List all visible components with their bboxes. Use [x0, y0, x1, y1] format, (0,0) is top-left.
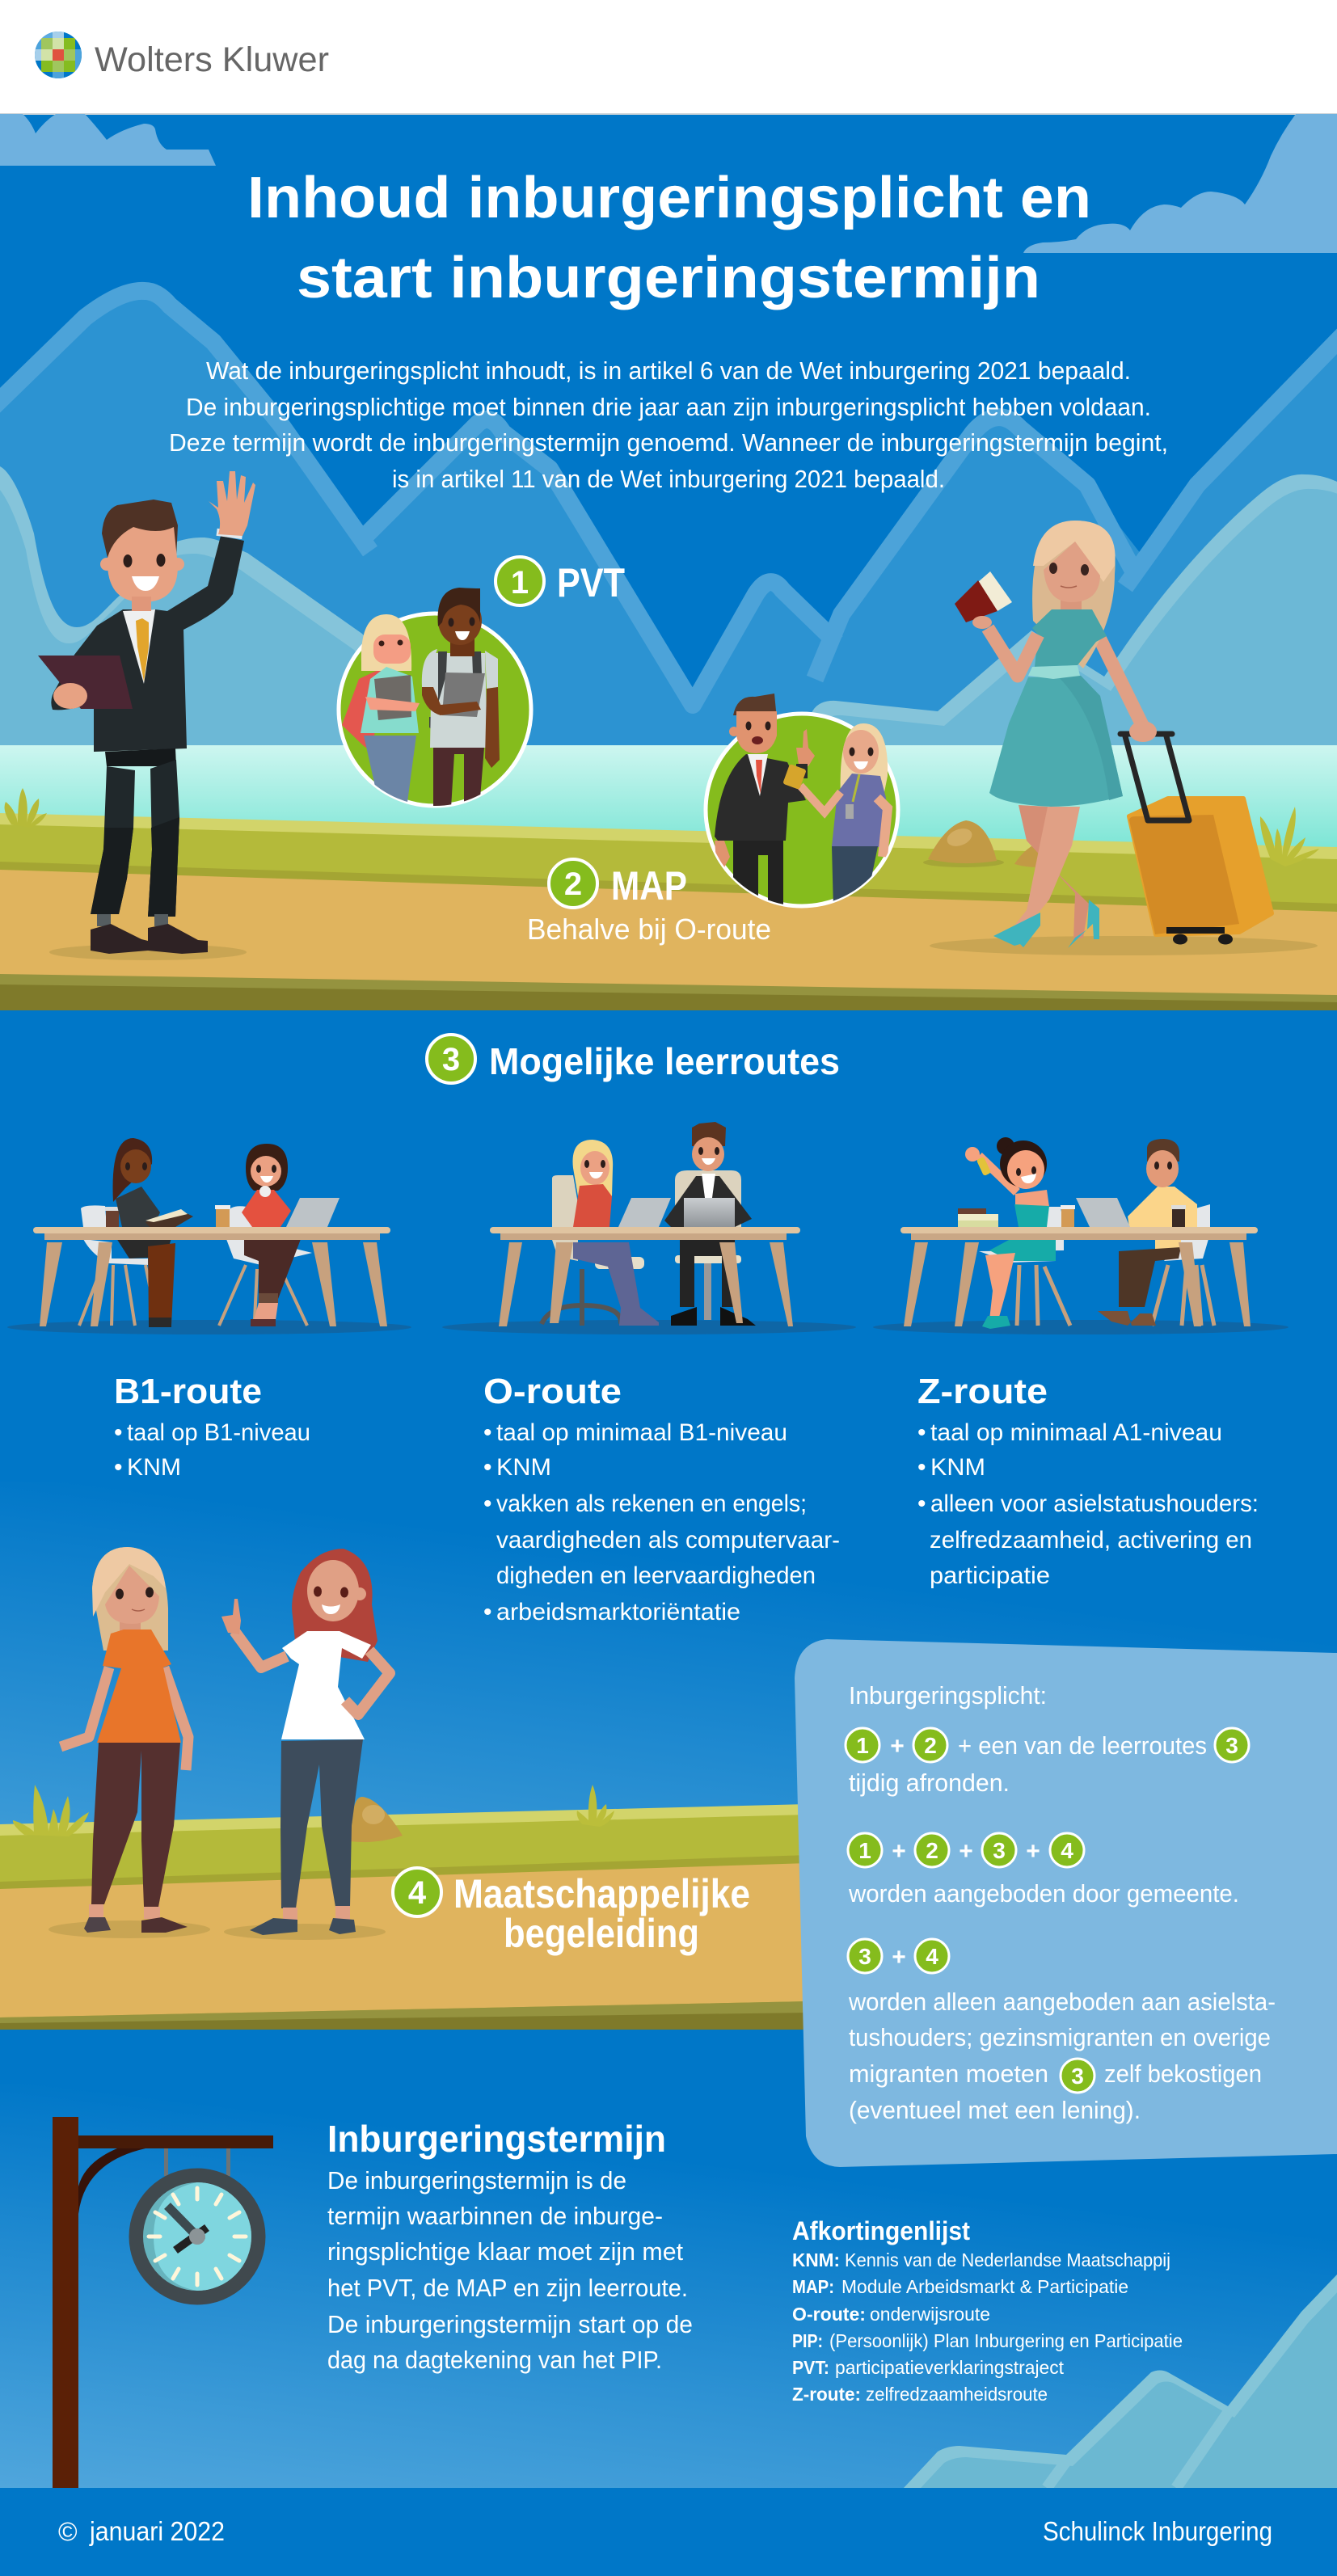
icon: hanging clock — [53, 2117, 273, 2488]
route text: Z-route: • — [917, 1419, 926, 1446]
rule 1: 2 — [924, 1733, 937, 1758]
step 2: MAP label — [527, 859, 771, 946]
route text: Z-route — [917, 1372, 1259, 1589]
section: inburgeringstermijn: De inburgeringstermijn start op de — [327, 2310, 693, 2338]
section: inburgeringstermijn: dag na dagtekening van het PIP. — [327, 2346, 662, 2374]
route text: Z-route: zelfredzaamheid, activering en — [930, 1527, 1252, 1554]
lower ground band — [0, 1804, 808, 2030]
rule 2 — [848, 1833, 1239, 1908]
step 4 label — [393, 1868, 750, 1956]
abbreviations list: Kennis van de Nederlandse Maatschappij — [845, 2249, 1170, 2270]
section: inburgeringstermijn: ringsplichtige klaar moet zijn met — [327, 2237, 683, 2266]
rule 3: 3 — [1071, 2064, 1084, 2089]
rule 3: 4 — [926, 1944, 938, 1969]
lower section background — [0, 2084, 1337, 2488]
step 4 label: begeleiding — [504, 1911, 699, 1956]
intro paragraph: is in artikel 11 van de Wet inburgering 2021 bepaald. — [392, 465, 945, 493]
route text: B1-route: • — [114, 1454, 123, 1481]
abbreviations list — [792, 2216, 1183, 2405]
abbreviations list: Afkortingenlijst — [792, 2216, 970, 2245]
step 2: MAP label: MAP — [611, 863, 687, 909]
intro paragraph — [169, 356, 1168, 493]
route text: B1-route: taal op B1-niveau — [127, 1419, 310, 1446]
section 3 heading: Mogelijke leerroutes — [489, 1040, 840, 1082]
abbreviations list: onderwijsroute — [870, 2304, 990, 2325]
rule 3: zelf bekostigen — [1104, 2060, 1262, 2088]
plant lower middle — [577, 1785, 614, 1827]
hero landscape background — [0, 291, 1337, 1010]
footer: © — [58, 2517, 78, 2546]
section: inburgeringstermijn: De inburgeringstermijn is de — [327, 2166, 626, 2194]
section 3 heading: 3 — [442, 1042, 460, 1077]
section: inburgeringstermijn: Inburgeringstermijn — [327, 2118, 666, 2160]
top left cloud — [0, 114, 216, 166]
route text: Z-route: Z-route — [917, 1372, 1048, 1411]
illustration: desk O-route — [442, 1122, 856, 1334]
footer: januari 2022 — [89, 2516, 225, 2546]
rock lower — [350, 1797, 403, 1842]
abbreviations list: Module Arbeidsmarkt & Participatie — [841, 2276, 1128, 2297]
illustration: two women — [49, 1547, 390, 1940]
step 4 label: 4 — [408, 1875, 427, 1911]
step 1: PVT label: PVT — [557, 560, 625, 605]
rule 3 — [848, 1939, 1276, 2124]
step 1: PVT label: 1 — [511, 565, 529, 601]
rule 1: + een van de leerroutes — [958, 1731, 1207, 1760]
plant left — [5, 788, 47, 828]
top right cloud — [1023, 114, 1337, 253]
logo: Wolters Kluwer globe — [35, 32, 82, 78]
logo wordmark: Wolters Kluwer — [95, 40, 329, 79]
step 4 label: Maatschappelijke — [453, 1871, 750, 1916]
illustration: man with clipboard — [38, 471, 255, 960]
section: inburgeringstermijn — [327, 2118, 693, 2374]
intro paragraph: Wat de inburgeringsplicht inhoudt, is in artikel 6 van de Wet inburgering 2021 bepaald. — [206, 356, 1131, 385]
route text: Z-route: • — [917, 1490, 926, 1517]
route text: O-route: • — [483, 1454, 492, 1481]
route text: O-route: taal op minimaal B1-niveau — [496, 1419, 787, 1446]
route text: O-route: O-route — [483, 1372, 622, 1411]
abbreviations list: PIP: — [792, 2330, 823, 2351]
rule 2: 4 — [1061, 1838, 1073, 1863]
abbreviations list: participatieverklaringstraject — [835, 2357, 1065, 2378]
rule 3: worden alleen aangeboden aan asielsta- — [848, 1988, 1276, 2016]
rule 3: migranten moeten — [849, 2060, 1048, 2088]
route text: O-route: digheden en leervaardigheden — [496, 1562, 816, 1589]
title — [247, 166, 1091, 310]
rule 3: + — [892, 1944, 906, 1971]
abbreviations list: PVT: — [792, 2357, 829, 2378]
route text: Z-route: alleen voor asielstatushouders: — [930, 1490, 1259, 1517]
section: inburgeringstermijn: het PVT, de MAP en zijn leerroute. — [327, 2274, 688, 2302]
abbreviations list: KNM: — [792, 2249, 840, 2270]
obligation panel — [795, 1639, 1337, 2167]
rule 1: tijdig afronden. — [849, 1769, 1010, 1797]
lower sky background — [0, 1482, 1337, 1894]
route text: O-route: vaardigheden als computervaar- — [496, 1527, 840, 1554]
rule 3: tushouders; gezinsmigranten en overige — [849, 2023, 1271, 2051]
rule 2: 3 — [993, 1838, 1006, 1863]
abbreviations list: O-route: — [792, 2304, 866, 2325]
route text: O-route: vakken als rekenen en engels; — [496, 1490, 807, 1517]
illustration: MAP interview in green circle — [706, 694, 898, 913]
route text: Z-route: participatie — [930, 1562, 1050, 1589]
step 1: PVT label — [496, 557, 625, 605]
rule 1 — [846, 1728, 1249, 1797]
plant lower left — [13, 1785, 89, 1836]
illustration: desk B1-route — [7, 1138, 411, 1334]
rule 2: + — [959, 1838, 973, 1865]
panel heading: Inburgeringsplicht: — [849, 1681, 1047, 1710]
rule 3: (eventueel met een lening). — [849, 2096, 1141, 2124]
rule 2: + — [1026, 1838, 1040, 1865]
footer: Schulinck Inburgering — [1043, 2516, 1272, 2546]
abbreviations list: Z-route: — [792, 2384, 861, 2405]
note: except O-route: Behalve bij O-route — [527, 913, 771, 946]
rule 1: 3 — [1225, 1733, 1238, 1758]
abbreviations list: MAP: — [792, 2276, 834, 2297]
rocks — [923, 820, 1051, 867]
rule 3: 3 — [858, 1944, 871, 1969]
illustration: PVT students in green circle — [339, 588, 531, 808]
abbreviations list: zelfredzaamheidsroute — [866, 2384, 1048, 2405]
section: inburgeringstermijn: termijn waarbinnen de inburge- — [327, 2202, 663, 2230]
route text: Z-route: KNM — [930, 1454, 985, 1481]
abbreviations list: (Persoonlijk) Plan Inburgering en Participatie — [829, 2330, 1183, 2351]
route text: O-route: • — [483, 1490, 492, 1517]
header with logo — [0, 0, 1337, 115]
rule 1: + — [890, 1733, 905, 1760]
intro paragraph: Deze termijn wordt de inburgeringstermijn genoemd. Wanneer de inburgeringstermijn begint, — [169, 428, 1168, 457]
route text: Z-route: • — [917, 1454, 926, 1481]
step 2: MAP label: 2 — [564, 866, 582, 902]
route text: B1-route — [114, 1372, 310, 1481]
rule 2: 2 — [926, 1838, 938, 1863]
rule 2: worden aangeboden door gemeente. — [848, 1879, 1239, 1908]
route text: O-route: • — [483, 1419, 492, 1446]
intro paragraph: De inburgeringsplichtige moet binnen drie jaar aan zijn inburgeringsplicht hebben voldaan. — [186, 393, 1151, 421]
route text: B1-route: KNM — [127, 1454, 181, 1481]
route text: O-route: KNM — [496, 1454, 551, 1481]
illustration: desk Z-route — [873, 1137, 1288, 1334]
rule 2: + — [892, 1838, 906, 1865]
route text: Z-route: taal op minimaal A1-niveau — [930, 1419, 1222, 1446]
title: Inhoud inburgeringsplicht en — [247, 166, 1091, 230]
illustration: woman with suitcase — [930, 521, 1318, 955]
footer — [0, 2488, 1337, 2576]
route text: O-route: arbeidsmarktoriëntatie — [496, 1599, 740, 1625]
title: start inburgeringstermijn — [297, 246, 1040, 310]
route text: B1-route: B1-route — [114, 1372, 262, 1411]
mountain bottom right — [904, 2275, 1337, 2499]
rule 2: 1 — [858, 1838, 871, 1863]
plant right — [1260, 807, 1319, 866]
rule 1: 1 — [856, 1733, 869, 1758]
route text: O-route — [483, 1372, 840, 1625]
route text: O-route: • — [483, 1599, 492, 1625]
route text: B1-route: • — [114, 1419, 123, 1446]
